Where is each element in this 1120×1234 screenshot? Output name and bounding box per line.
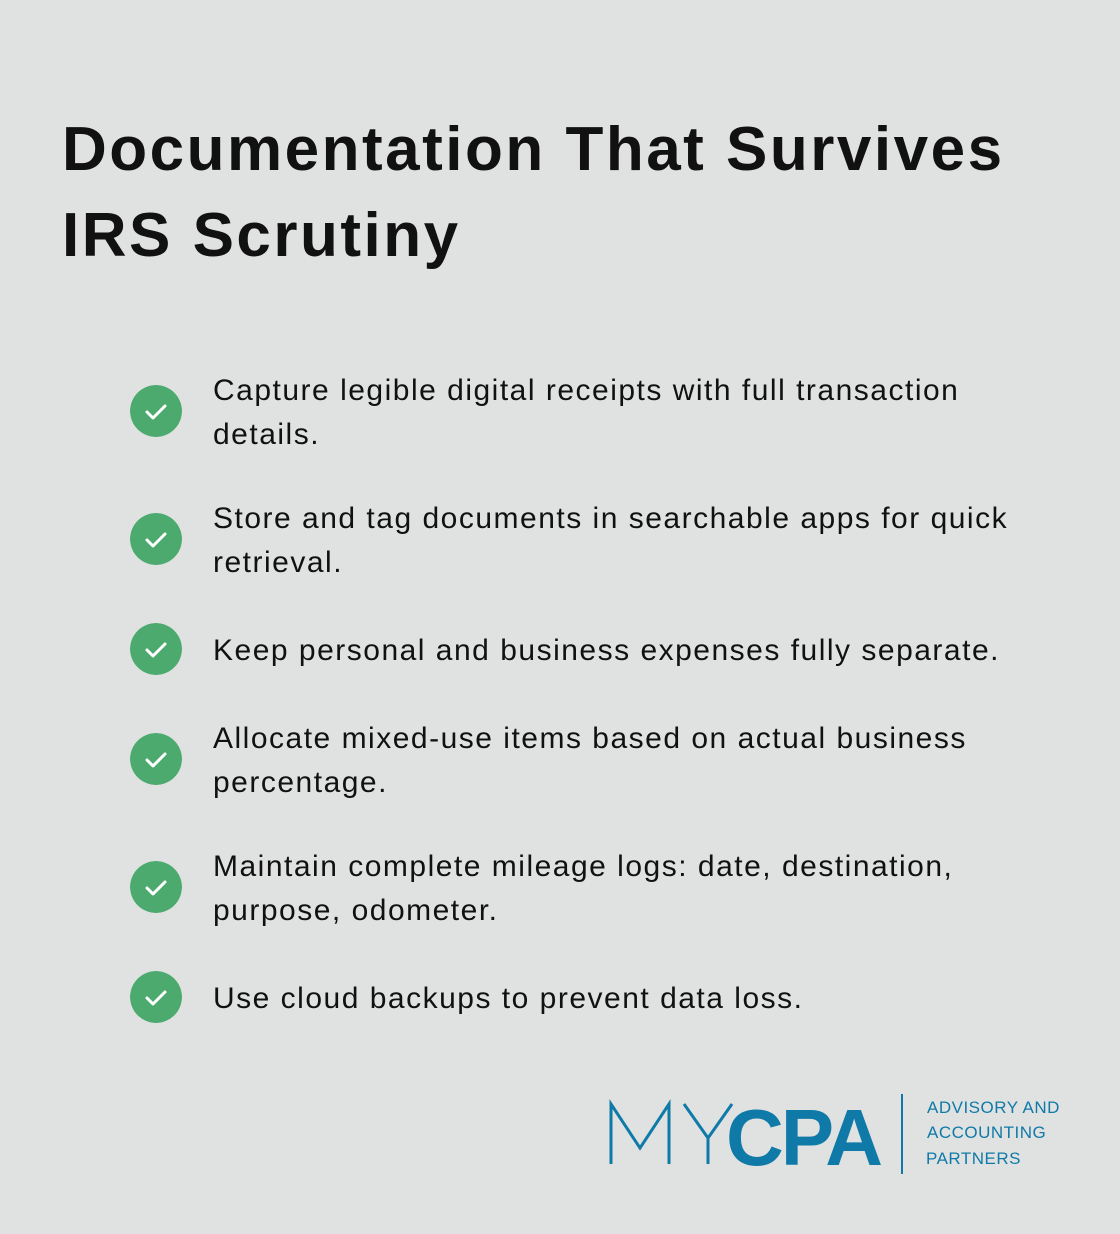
icon: check [130,861,182,913]
item: mixed-use [130,722,967,799]
text: Keep personal and business expenses fully separate. [213,634,1000,667]
text: Allocate mixed-use items based on actual business [213,722,967,755]
text: Capture legible digital receipts with full transaction [213,374,959,407]
logo tagline: PARTNERS [926,1149,1021,1168]
item: receipts [130,374,959,451]
item: cloud backups [130,971,803,1023]
title: IRS Scrutiny [62,201,461,270]
icon: check [130,623,182,675]
text [213,374,959,451]
logo tagline [926,1098,1060,1168]
text [213,502,1008,579]
title [62,115,1005,270]
logo: MYCPA [610,1093,1060,1176]
text: Maintain complete mileage logs: date, destination, [213,850,953,883]
title: Documentation That Survives [62,115,1005,184]
text: retrieval. [213,546,343,579]
text: purpose, odometer. [213,894,499,927]
icon: check [130,385,182,437]
text: percentage. [213,766,388,799]
item: separate expenses [130,623,1000,675]
item: mileage [130,850,953,927]
item: store and tag [130,502,1008,579]
logo wordmark [611,1093,881,1182]
icon: check [130,971,182,1023]
text [213,850,953,927]
text: Store and tag documents in searchable apps for quick [213,502,1008,535]
logo tagline: ACCOUNTING [927,1123,1046,1142]
logo tagline: ADVISORY AND [927,1098,1060,1117]
text: Use cloud backups to prevent data loss. [213,982,803,1015]
text [213,722,967,799]
icon: check [130,513,182,565]
text: details. [213,418,320,451]
icon: check [130,733,182,785]
